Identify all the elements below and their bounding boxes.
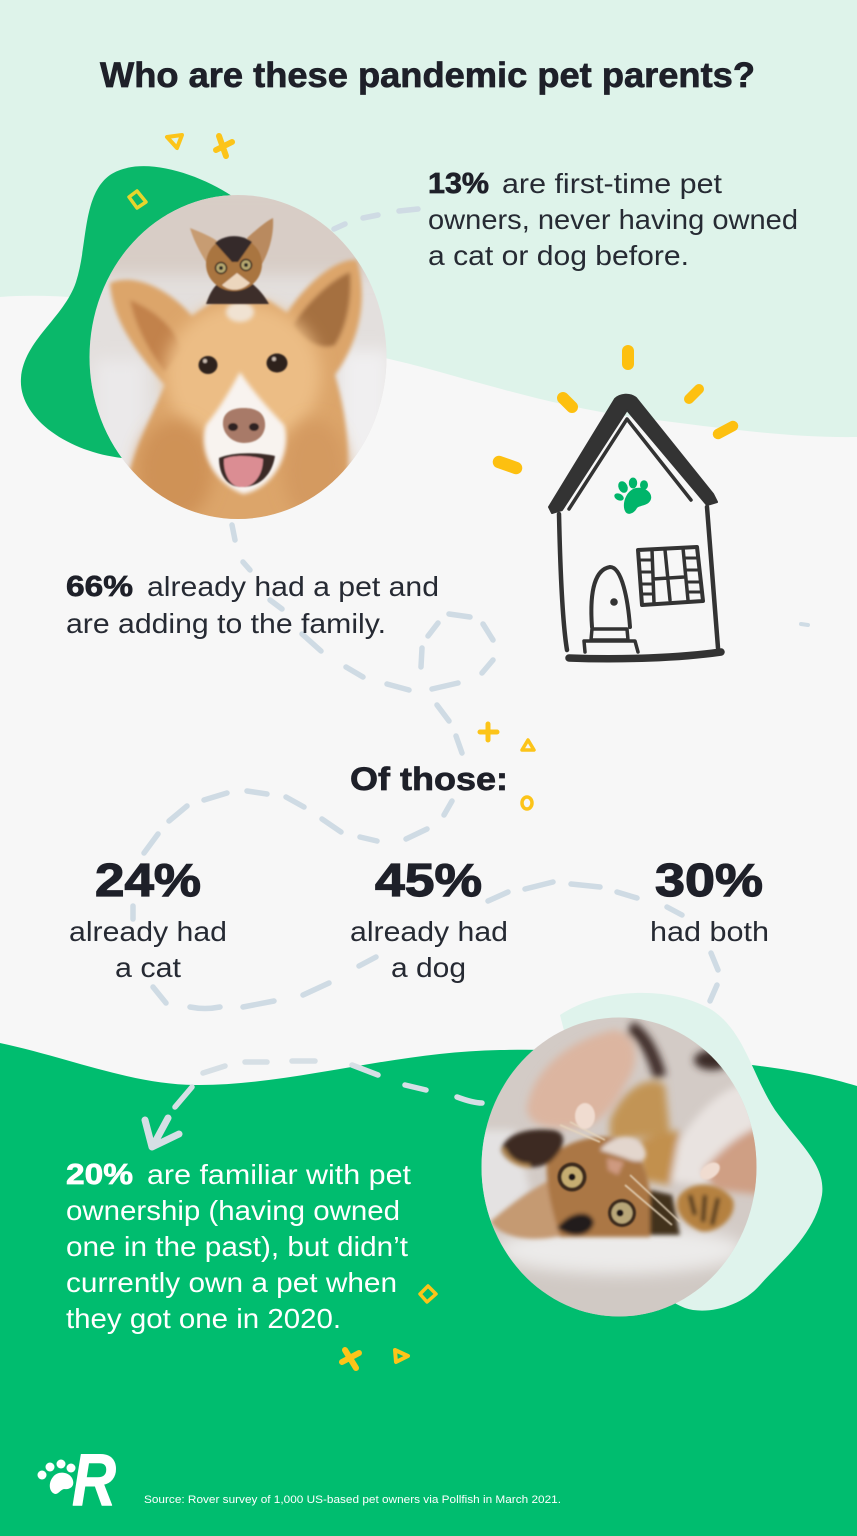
text: 13% first-time owners: owners, never having owned [428, 204, 798, 235]
stat: 30% had both [650, 854, 769, 947]
stat: 24% already had a cat: already had [69, 916, 227, 947]
photo: dog with kitten [85, 185, 395, 525]
dog face [198, 354, 288, 487]
stat: 45% already had a dog: a dog [391, 952, 466, 983]
heading: Of those: Of those: [350, 761, 508, 797]
dashed path: loop behind stats [133, 791, 452, 1008]
dashed path: dog to first stat [334, 209, 418, 229]
blob: green behind dog [21, 166, 232, 458]
white blaze and muzzle [204, 372, 286, 494]
text: 13% first-time owners: are first-time pet [502, 168, 722, 199]
source note: Source: Rover survey of 1,000 US-based pet owners via Pollfish in March 2021. [144, 1494, 561, 1506]
blob: mint behind cat [560, 993, 822, 1311]
title: Who are these pandemic pet parents? [100, 56, 755, 95]
confetti: top [129, 135, 232, 208]
kitten [190, 218, 273, 304]
cat body and face [490, 1130, 734, 1239]
text: 66% already had a pet [66, 571, 439, 639]
text: 20% familiar with pet ownership: one in the past), but didn’t [66, 1231, 408, 1262]
text: 20% familiar with pet ownership: currently own a pet when [66, 1267, 397, 1298]
logo: Rover paw and R: R [72, 1440, 116, 1521]
stat: 45% already had a dog: already had [350, 916, 508, 947]
text: 20% familiar with pet ownership [66, 1159, 411, 1334]
text: 66% already had a pet: already had a pet and [147, 571, 439, 602]
stat: 24% already had a cat: a cat [115, 952, 181, 983]
confetti: bottom [342, 1286, 436, 1368]
stat: 45% already had a dog: 45% [375, 854, 482, 906]
dog body and ears [110, 260, 362, 525]
text: 13% first-time owners: 13% [428, 168, 489, 200]
paw on house [613, 478, 651, 514]
stat: 24% already had a cat [69, 854, 227, 983]
logo: Rover paw and R [38, 1440, 116, 1521]
stat: 24% already had a cat: 24% [95, 854, 201, 906]
stat: 30% had both: 30% [655, 854, 763, 906]
arrow head [145, 1118, 179, 1147]
text: 20% familiar with pet ownership: 20% [66, 1159, 133, 1191]
text: 13% first-time owners [428, 168, 798, 271]
text: 20% familiar with pet ownership: are familiar with pet [147, 1159, 411, 1190]
dashed path: 45% to 30% to cat photo [488, 882, 718, 1001]
icon: house with paw and yellow rays [499, 351, 733, 659]
background: mint top wave [0, 0, 857, 437]
text: 66% already had a pet: are adding to the family. [66, 608, 386, 639]
confetti: middle [480, 724, 534, 809]
text: 66% already had a pet: 66% [66, 571, 133, 603]
fluff [519, 1270, 717, 1316]
dashed path: dog down through text to Of those [232, 525, 493, 753]
stat: 45% already had a dog [350, 854, 508, 983]
dashed path: cat photo to arrow [175, 1061, 482, 1107]
photo: kitten playing [482, 1018, 756, 1316]
text: 13% first-time owners: a cat or dog before. [428, 240, 689, 271]
stat: 30% had both: had both [650, 916, 769, 947]
small dash right edge [801, 624, 808, 625]
text: 20% familiar with pet ownership: ownership (having owned [66, 1195, 400, 1226]
text: 20% familiar with pet ownership: they got one in 2020. [66, 1303, 341, 1334]
background: green bottom wave [0, 1043, 857, 1536]
